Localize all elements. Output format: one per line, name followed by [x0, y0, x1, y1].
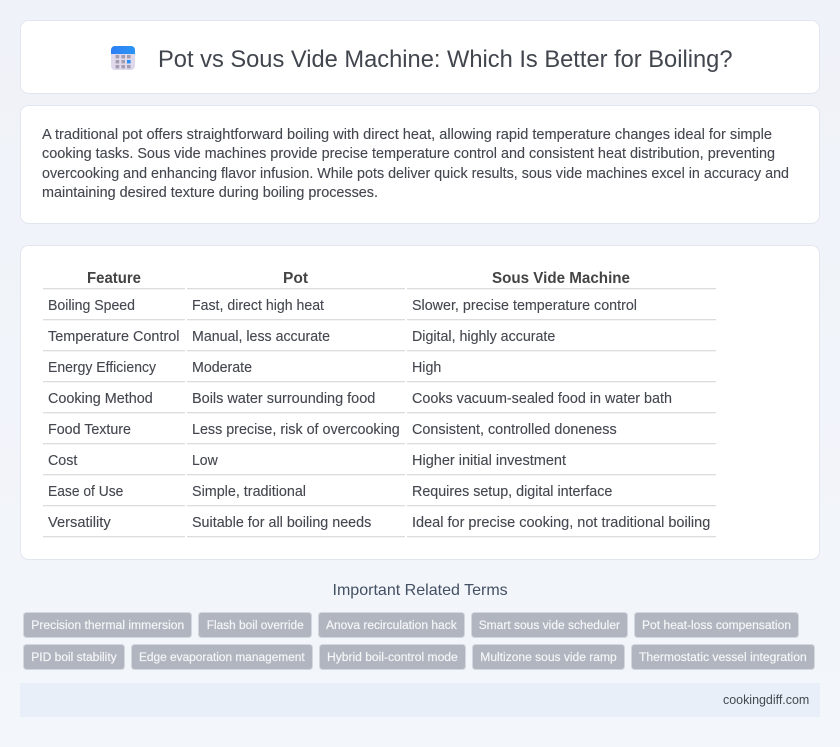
row: cooking method: Cooking Method [48, 391, 153, 407]
text block: introduction: cooking tasks. Sous vide machines provide precise temperature control and consistent heat distribution, preventing [42, 146, 775, 162]
panel: introduction paragraph [20, 106, 820, 224]
tag [320, 644, 466, 670]
panel: comparison table [20, 246, 820, 560]
row: food texture: Less precise, risk of overcooking [192, 422, 400, 438]
tag: Flash boil override [207, 618, 304, 632]
tag: Smart sous vide scheduler [479, 618, 620, 632]
row: boiling speed: Slower, precise temperature control [412, 298, 637, 314]
tag [632, 644, 814, 670]
tag [472, 612, 628, 638]
related term tags [24, 612, 814, 670]
table header row: Sous Vide Machine [492, 270, 630, 287]
tag [24, 612, 192, 638]
tag [24, 644, 124, 670]
row: cooking method: Cooks vacuum-sealed food in water bath [412, 391, 672, 407]
row: versatility: Ideal for precise cooking, not traditional boiling [412, 515, 710, 531]
tag: Pot heat-loss compensation [642, 618, 791, 632]
row: food texture: Food Texture [48, 422, 131, 438]
footer bar [20, 683, 820, 717]
footer source text: cookingdiff.com [723, 693, 809, 707]
tag: Hybrid boil-control mode [327, 650, 458, 664]
row: cost: Cost [48, 453, 77, 469]
row: food texture: Consistent, controlled doneness [412, 422, 617, 438]
tag [198, 612, 312, 638]
row: energy efficiency: Energy Efficiency [48, 360, 157, 376]
title: Pot vs Sous Vide Machine: Which Is Better for Boiling? [158, 46, 732, 73]
row: temperature control [48, 329, 555, 345]
row: food texture [48, 422, 617, 438]
row: temperature control: Digital, highly accurate [412, 329, 555, 345]
row: temperature control: Manual, less accurate [192, 329, 330, 345]
row: ease of use: Simple, traditional [192, 484, 306, 500]
tag: Anova recirculation hack [326, 618, 457, 632]
row: cooking method [48, 391, 672, 407]
text block: introduction [42, 127, 789, 201]
row: ease of use: Requires setup, digital interface [412, 484, 612, 500]
row: ease of use [48, 484, 612, 500]
tag: Precision thermal immersion [31, 618, 184, 632]
heading: important related terms: Important Related Terms [332, 582, 508, 599]
table header row: Feature [87, 270, 141, 287]
table header row: Pot [283, 270, 309, 287]
table header row [87, 270, 630, 287]
row: cost [48, 453, 566, 469]
tag: Edge evaporation management [139, 650, 305, 664]
tag: Thermostatic vessel integration [639, 650, 807, 664]
row: boiling speed: Fast, direct high heat [192, 298, 324, 314]
tag: Multizone sous vide ramp [480, 650, 617, 664]
panel: title header [20, 20, 820, 94]
row: cost: Higher initial investment [412, 453, 566, 469]
row: energy efficiency: High [412, 360, 441, 376]
text block: introduction: maintaining desired texture during boiling processes. [42, 185, 378, 201]
row: temperature control: Temperature Control [48, 329, 180, 345]
row: versatility: Versatility [48, 515, 111, 531]
text block: introduction: overcooking and enhancing flavor infusion. While pots deliver quick results, sous vide machines excel in accuracy and [42, 166, 789, 182]
row: versatility: Suitable for all boiling needs [192, 515, 371, 531]
tag [318, 612, 464, 638]
row: ease of use: Ease of Use [48, 484, 123, 500]
icon: calendar [111, 46, 135, 70]
tag: PID boil stability [31, 650, 117, 664]
tag [132, 644, 312, 670]
row: boiling speed: Boiling Speed [48, 298, 135, 314]
row: energy efficiency [48, 360, 441, 376]
row: cost: Low [192, 453, 218, 469]
tag [634, 612, 798, 638]
row: versatility [48, 515, 710, 531]
row: boiling speed [48, 298, 637, 314]
row: cooking method: Boils water surrounding food [192, 391, 375, 407]
row: energy efficiency: Moderate [192, 360, 252, 376]
text block: introduction: A traditional pot offers straightforward boiling with direct heat, allowing rapid temperature changes ideal for simple [42, 127, 772, 143]
tag [472, 644, 624, 670]
